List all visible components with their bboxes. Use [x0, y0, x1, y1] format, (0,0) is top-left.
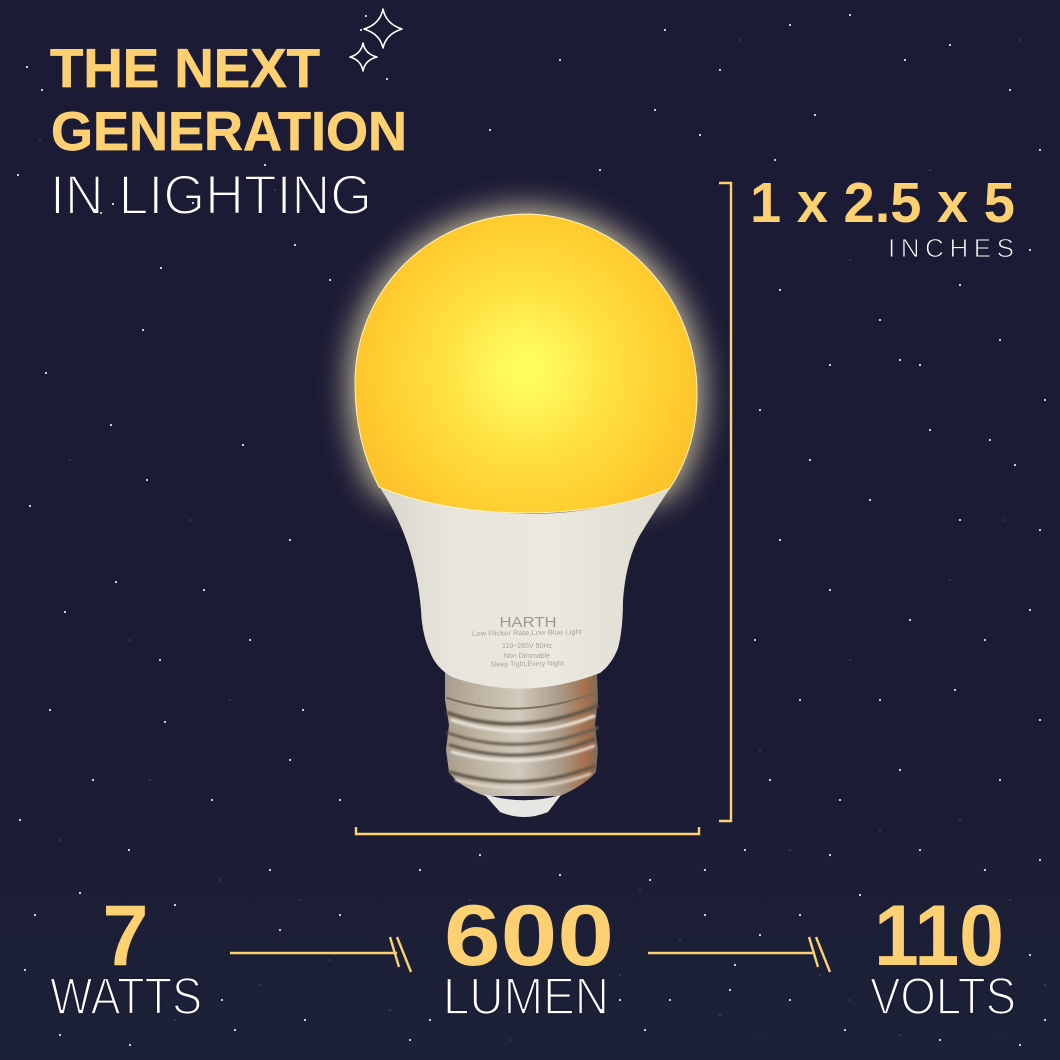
- stat: 110 volts: 110: [874, 888, 1004, 984]
- stat: 7 watts: [50, 888, 202, 1026]
- title line: in lighting: IN LIGHTING: [50, 163, 372, 226]
- white bulb body: [379, 486, 671, 689]
- stat: 600 lumen: [443, 888, 614, 1026]
- bulb printed label: Sleep Tight,Every Night: [490, 660, 564, 669]
- stat: 600 lumen: 600: [444, 888, 614, 984]
- stat: 7 watts: 7: [102, 888, 148, 984]
- height dimension bracket: [719, 183, 731, 821]
- dimensions callout: 1 x 2.5 x 5: [750, 171, 1015, 235]
- arrow: watts to lumen: [230, 937, 411, 972]
- stat: 600 lumen: LUMEN: [443, 968, 609, 1026]
- stat: 7 watts: WATTS: [50, 968, 202, 1026]
- bulb printed label: [472, 614, 582, 669]
- title line: the next: THE NEXT: [50, 37, 320, 99]
- bulb printed label: Low Flicker Rate,Low Blue Light: [472, 629, 582, 638]
- icon: sparkle stars: [350, 9, 402, 71]
- title: [50, 37, 407, 226]
- bulb glow: [355, 214, 697, 513]
- dimensions callout: INCHES: [888, 233, 1014, 263]
- dimensions callout: [750, 171, 1015, 263]
- title line: generation: GENERATION: [51, 100, 407, 162]
- width dimension bracket: [356, 827, 699, 834]
- light bulb: [355, 214, 697, 817]
- glowing yellow globe: [355, 214, 697, 513]
- metal screw base: [445, 672, 598, 817]
- stat: 110 volts: [870, 888, 1016, 1026]
- stat: 110 volts: VOLTS: [870, 968, 1016, 1026]
- arrow: lumen to volts: [648, 937, 830, 972]
- bulb printed label: 110~265V 50Hz: [502, 643, 552, 650]
- white base tip: [484, 794, 561, 817]
- bulb printed label: HARTH: [500, 614, 556, 631]
- bulb printed label: Non Dimmable: [504, 653, 550, 660]
